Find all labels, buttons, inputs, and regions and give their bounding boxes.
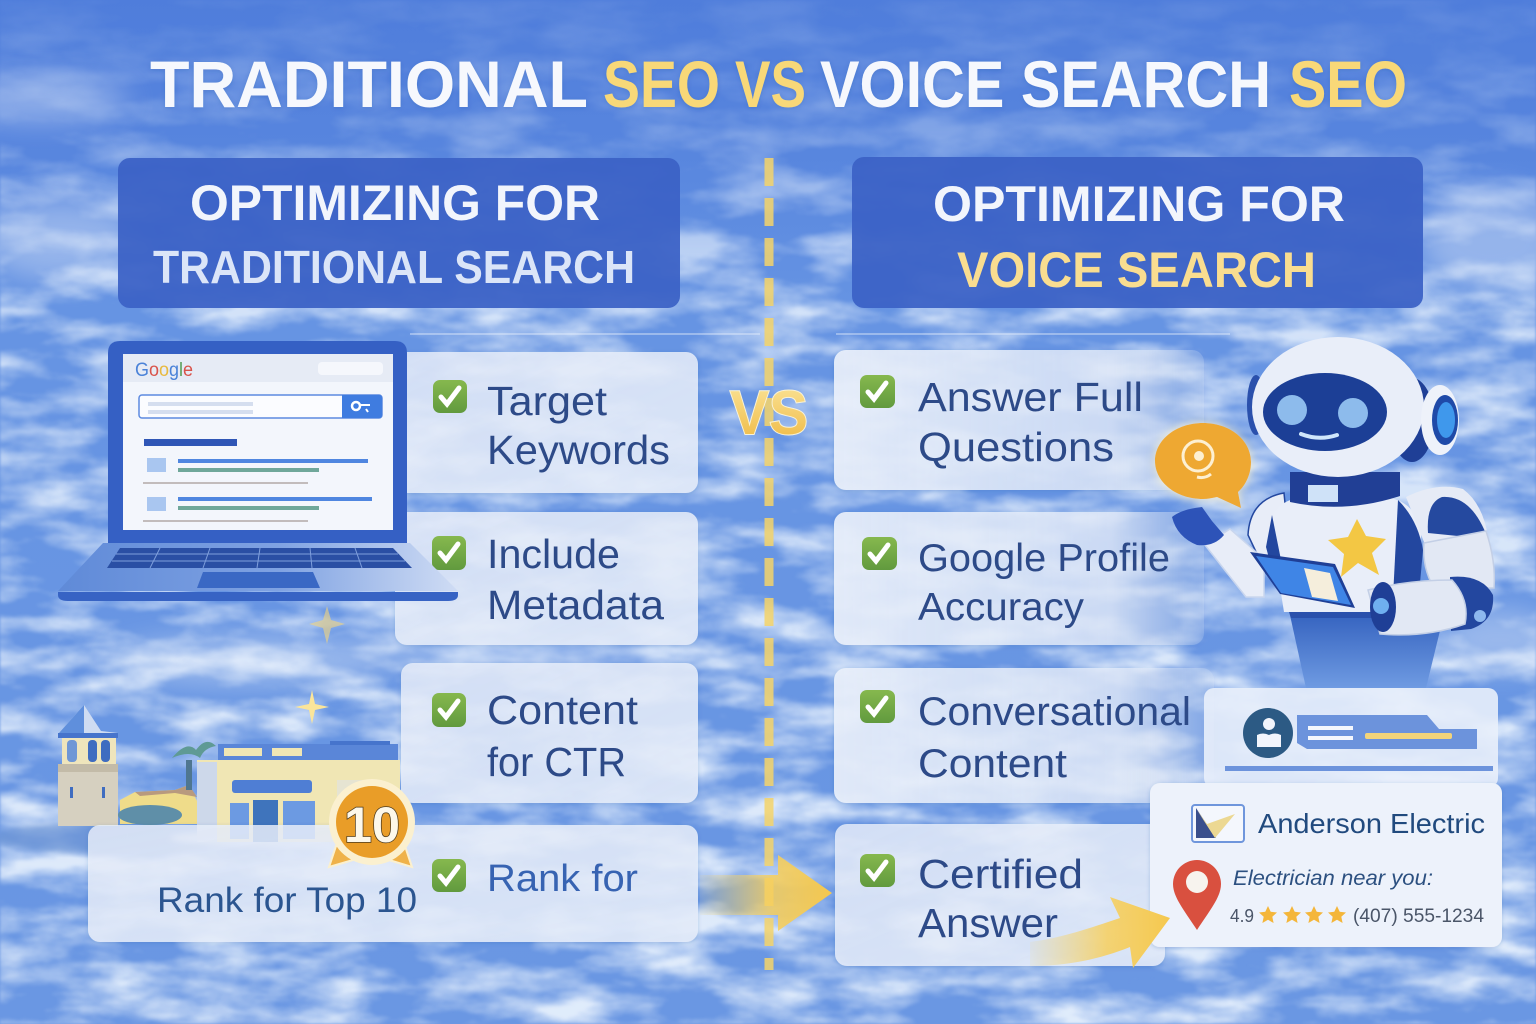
robot forearm (1368, 580, 1466, 635)
icon: laptop with Google results (58, 341, 458, 601)
robot neck (1290, 472, 1400, 507)
card: Anderson Electric listing: Anderson Electric (1258, 808, 1485, 839)
robot head (1252, 337, 1424, 477)
title: TRADITIONAL (150, 47, 588, 121)
card: Anderson Electric listing: Electrician near you: (1233, 867, 1433, 890)
card: conversational content: Conversational (918, 690, 1191, 734)
card: google profile accuracy: Accuracy (918, 586, 1085, 629)
title: SEO (1289, 47, 1407, 121)
rating stars (1259, 906, 1346, 923)
left column cards (395, 352, 698, 803)
robot visor (1263, 373, 1387, 451)
panel header: voice search: OPTIMIZING FOR (933, 176, 1345, 232)
icon: orange speech bubble (1155, 423, 1251, 508)
card: answer full questions: Answer Full (918, 374, 1143, 420)
icon: map pin (1173, 860, 1221, 930)
card: google profile accuracy: Google Profile (918, 537, 1170, 580)
panel header: traditional search (118, 158, 680, 308)
card: rank for top 10: Rank for (487, 858, 638, 900)
card: content for CTR: Content (487, 687, 639, 733)
robot hand (1172, 507, 1224, 545)
robot headphone cup (1421, 385, 1459, 455)
robot left forearm (1205, 529, 1264, 597)
card: Anderson Electric listing: 4.9 (1230, 906, 1254, 926)
card: answer full questions (834, 350, 1204, 490)
panel header: traditional search: OPTIMIZING FOR (190, 175, 600, 231)
card: certified answer: Answer (918, 900, 1058, 946)
card: target keywords: Keywords (487, 427, 670, 473)
icon: top 10 badge: 10 (344, 797, 400, 853)
card: Anderson Electric listing: (407) 555-1234 (1353, 906, 1484, 927)
icon: logo (1192, 805, 1244, 842)
illustration: robot with tablet (1172, 337, 1494, 688)
card: include metadata: Include (487, 531, 620, 577)
robot tablet (1250, 552, 1355, 608)
card: rank for top 10 (88, 825, 698, 942)
panel header: traditional search: TRADITIONAL SEARCH (153, 241, 635, 293)
right column cards (834, 350, 1214, 966)
illustration: town buildings (0, 690, 430, 854)
card: rank for top 10: Rank for Top 10 (157, 881, 417, 920)
card: certified answer: Certified (918, 851, 1083, 897)
vs label: VS (730, 379, 808, 448)
robot star (1328, 519, 1386, 577)
title: VOICE SEARCH (820, 47, 1271, 121)
robot headphone band (1390, 378, 1434, 462)
robot left ear (1247, 375, 1265, 435)
robot wrist (1370, 582, 1396, 632)
robot torso (1270, 497, 1422, 612)
card: profile listing bar (1204, 688, 1498, 788)
title: VS (735, 47, 806, 121)
decorative star glow (309, 606, 345, 644)
panel header: voice search (852, 157, 1423, 308)
arrow: certified answer to listing (1030, 897, 1170, 968)
card: target keywords (395, 352, 698, 493)
icon: top 10 badge (329, 779, 415, 867)
card: content for CTR: for CTR (487, 739, 626, 785)
card: google profile accuracy (834, 512, 1204, 645)
centre dashed divider (764, 158, 774, 970)
card: Anderson Electric listing (1150, 783, 1502, 947)
arrow: centre to certified answer (700, 855, 832, 931)
robot upper arm (1424, 531, 1494, 588)
robot elbow (1450, 577, 1493, 631)
robot legs (1288, 606, 1446, 688)
card: answer full questions: Questions (918, 424, 1114, 470)
robot left shoulder (1248, 493, 1290, 573)
card: conversational content (834, 668, 1214, 803)
panel header: voice search: VOICE SEARCH (957, 242, 1316, 298)
title (150, 47, 1407, 121)
title: SEO (603, 47, 720, 121)
card: content for CTR (401, 663, 698, 803)
card: target keywords: Target (487, 378, 608, 424)
card: conversational content: Content (918, 742, 1067, 786)
card: include metadata: Metadata (487, 582, 664, 628)
icon: laptop with Google results: Google (135, 360, 193, 381)
robot right shoulder (1406, 487, 1488, 547)
card: include metadata (395, 512, 698, 645)
card: certified answer (835, 824, 1165, 966)
